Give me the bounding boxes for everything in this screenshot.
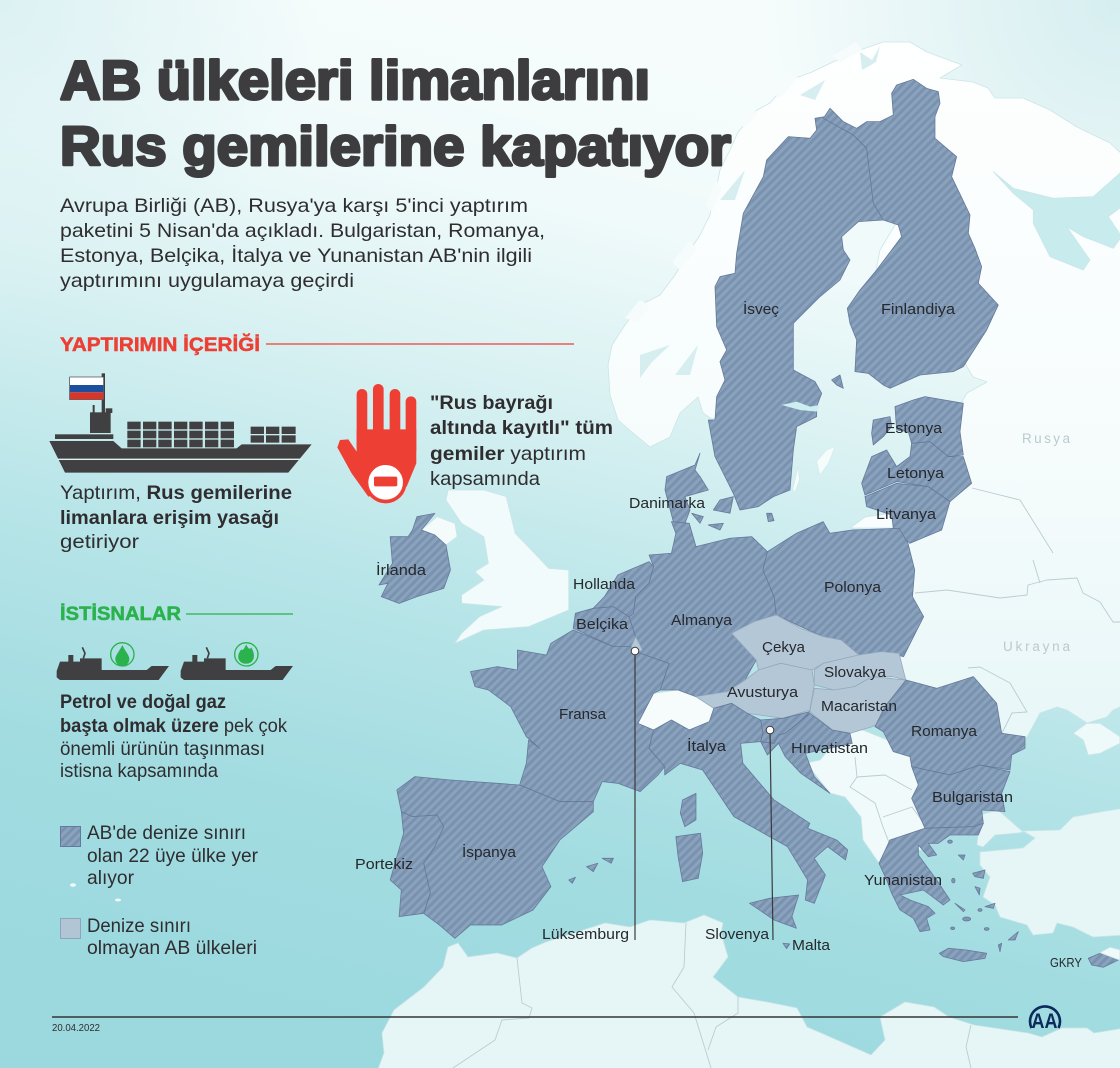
country labels: Danimarka bbox=[629, 496, 706, 512]
country: Cyprus bbox=[1088, 947, 1120, 967]
countries: Sweden and Finland bbox=[665, 79, 998, 543]
legend: EU countries with sea border: olan 22 üye ülke yer bbox=[87, 845, 258, 867]
country: Czechia bbox=[732, 615, 859, 670]
country: Luxembourg bbox=[631, 637, 642, 653]
icon: cargo ship with Russian flag bbox=[49, 373, 312, 473]
text: port access ban: Yaptırım, Rus gemilerine bbox=[60, 482, 292, 504]
country labels: Estonya bbox=[885, 421, 943, 437]
country: France bbox=[471, 630, 669, 802]
text: exemptions: başta olmak üzere pek çok bbox=[60, 715, 287, 737]
country labels: GKRY bbox=[1050, 956, 1083, 970]
intro paragraph: Avrupa Birliği (AB), Rusya'ya karşı 5'inci yaptırım bbox=[60, 195, 528, 217]
country: Estonia bbox=[895, 397, 963, 457]
Crete and Aegean islands bbox=[939, 840, 1018, 962]
country: Lithuania bbox=[865, 483, 950, 543]
text: port access ban bbox=[60, 482, 292, 553]
country labels: Macaristan bbox=[821, 699, 897, 715]
land: White Sea inlet bbox=[993, 172, 1120, 270]
text: Russian-flagged ships: gemiler yaptırım bbox=[430, 443, 586, 465]
text: Russian-flagged ships: kapsamında bbox=[430, 468, 540, 490]
text: Russian-flagged ships: "Rus bayrağı bbox=[430, 392, 553, 414]
country: Ireland bbox=[379, 513, 450, 603]
country: Spain bbox=[397, 777, 593, 938]
country: Slovakia bbox=[814, 652, 906, 690]
land: Switzerland and Balkans bbox=[638, 690, 925, 863]
legend: landlocked EU countries bbox=[60, 915, 257, 959]
land: Turkey bbox=[977, 808, 1120, 937]
intro paragraph: Estonya, Belçika, İtalya ve Yunanistan AB'nin ilgili bbox=[60, 244, 532, 267]
text: exemptions bbox=[60, 691, 287, 782]
country labels: Letonya bbox=[887, 466, 945, 482]
countries: south-east Europe bbox=[875, 677, 1120, 967]
country: Germany bbox=[629, 522, 776, 697]
text: exemptions: önemli ürünün taşınması bbox=[60, 738, 265, 760]
intro paragraph: yaptırımını uygulamaya geçirdi bbox=[60, 270, 354, 292]
country labels: Litvanya bbox=[876, 507, 937, 523]
icon: red stop hand bbox=[337, 389, 416, 503]
country: Latvia bbox=[862, 442, 972, 502]
country: Romania bbox=[875, 677, 1025, 775]
legend: EU countries with sea border: alıyor bbox=[87, 867, 134, 889]
text: port access ban: limanlara erişim yasağı bbox=[60, 507, 279, 529]
title bbox=[60, 49, 731, 177]
country labels: Malta bbox=[792, 938, 831, 954]
land: Kaliningrad bbox=[850, 513, 893, 528]
land: Crimea bbox=[1073, 723, 1120, 755]
countries: western and central Europe bbox=[379, 513, 924, 949]
country labels: Belçika bbox=[576, 617, 629, 633]
text: port access ban: getiriyor bbox=[60, 531, 140, 553]
intro paragraph bbox=[60, 195, 545, 292]
country labels: İspanya bbox=[462, 843, 517, 861]
country: Slovenia bbox=[761, 712, 810, 743]
text: exemptions: Petrol ve doğal gaz bbox=[60, 691, 226, 713]
text: Russian-flagged ships bbox=[430, 392, 613, 490]
borders: non-EU neighbours bbox=[453, 488, 1120, 1068]
intro paragraph: paketini 5 Nisan'da açıkladı. Bulgaristan, Romanya, bbox=[60, 220, 545, 242]
country labels: Avusturya bbox=[727, 685, 799, 701]
Russian flag bbox=[70, 377, 104, 400]
country labels: İrlanda bbox=[376, 561, 427, 579]
country: Denmark bbox=[665, 453, 733, 530]
logo: AA: AA bbox=[1032, 1010, 1058, 1033]
country labels: Rusya bbox=[1022, 431, 1070, 446]
legend: landlocked EU countries: Denize sınırı bbox=[87, 915, 191, 937]
callout line: Slovenia bbox=[766, 726, 774, 940]
country: Finland bbox=[823, 79, 998, 388]
legend: EU countries with sea border bbox=[60, 822, 258, 889]
heading: İSTİSNALAR: İSTİSNALAR bbox=[60, 604, 181, 625]
heading: YAPTIRIMIN İÇERİĞİ: YAPTIRIMIN İÇERİĞİ bbox=[60, 334, 260, 356]
country labels: İtalya bbox=[687, 737, 727, 755]
country: Portugal bbox=[390, 812, 444, 917]
icon: oil tanker bbox=[57, 643, 169, 680]
country labels: Yunanistan bbox=[864, 873, 942, 889]
country labels: Lüksemburg bbox=[542, 927, 629, 943]
Estonian islands bbox=[872, 417, 892, 445]
country: Greece bbox=[879, 823, 983, 932]
country labels: Hırvatistan bbox=[791, 741, 868, 757]
country labels: Slovakya bbox=[824, 665, 887, 681]
country labels: Almanya bbox=[671, 613, 733, 629]
text: Russian-flagged ships: altında kayıtlı" tüm bbox=[430, 417, 613, 439]
country labels: Romanya bbox=[911, 724, 978, 740]
callout line: Luxembourg bbox=[631, 647, 639, 940]
title: AB ülkeleri limanlarını bbox=[60, 49, 650, 111]
containers bbox=[127, 422, 296, 447]
country labels: İsveç bbox=[743, 300, 779, 318]
country labels: Slovenya bbox=[705, 927, 770, 943]
country: Italy bbox=[649, 703, 848, 903]
ship hull bbox=[49, 441, 312, 473]
country labels: Finlandiya bbox=[881, 302, 956, 318]
country labels bbox=[355, 300, 1083, 970]
country: Poland bbox=[763, 522, 924, 657]
land: Scandinavia and Russia bbox=[608, 42, 1120, 740]
country labels: Ukrayna bbox=[1003, 639, 1070, 654]
islands: Corsica, Sardinia, Sicily, Malta bbox=[676, 793, 799, 949]
map of Europe bbox=[355, 42, 1120, 1068]
country labels: Portekiz bbox=[355, 857, 413, 873]
islands: Aland, Gotland, Oland bbox=[767, 375, 843, 522]
country: Austria bbox=[696, 663, 814, 718]
country: Hungary bbox=[810, 677, 906, 733]
Azores islets bbox=[70, 883, 121, 902]
country: Bulgaria bbox=[912, 765, 1010, 828]
country labels: Çekya bbox=[762, 640, 806, 656]
icon: gas tanker with flame bbox=[181, 643, 293, 680]
country labels: Bulgaristan bbox=[932, 790, 1013, 806]
country: Belgium bbox=[573, 607, 636, 647]
country: Croatia bbox=[761, 713, 852, 793]
legend: EU countries with sea border: AB'de denize sınırı bbox=[87, 822, 246, 844]
country: Netherlands bbox=[593, 562, 654, 617]
country labels: Polonya bbox=[824, 580, 882, 596]
Norwegian coastal islands and fjords bbox=[625, 42, 880, 378]
land: Northern Ireland bbox=[421, 517, 457, 545]
land: North Africa bbox=[377, 915, 1120, 1068]
title: Rus gemilerine kapatıyor bbox=[60, 115, 731, 177]
land: Great Britain bbox=[446, 490, 569, 643]
legend: landlocked EU countries: olmayan AB ülkeleri bbox=[87, 937, 257, 959]
country: Sweden bbox=[708, 117, 883, 510]
country labels: Fransa bbox=[559, 707, 607, 723]
ship deck and tower bbox=[55, 373, 113, 439]
footer rule bbox=[52, 1016, 1018, 1018]
date: 20.04.2022 bbox=[52, 1023, 100, 1034]
text: exemptions: istisna kapsamında bbox=[60, 760, 218, 782]
lake Vänern bbox=[782, 402, 820, 412]
islands: Balearics bbox=[569, 858, 613, 883]
country labels: Hollanda bbox=[573, 577, 636, 593]
